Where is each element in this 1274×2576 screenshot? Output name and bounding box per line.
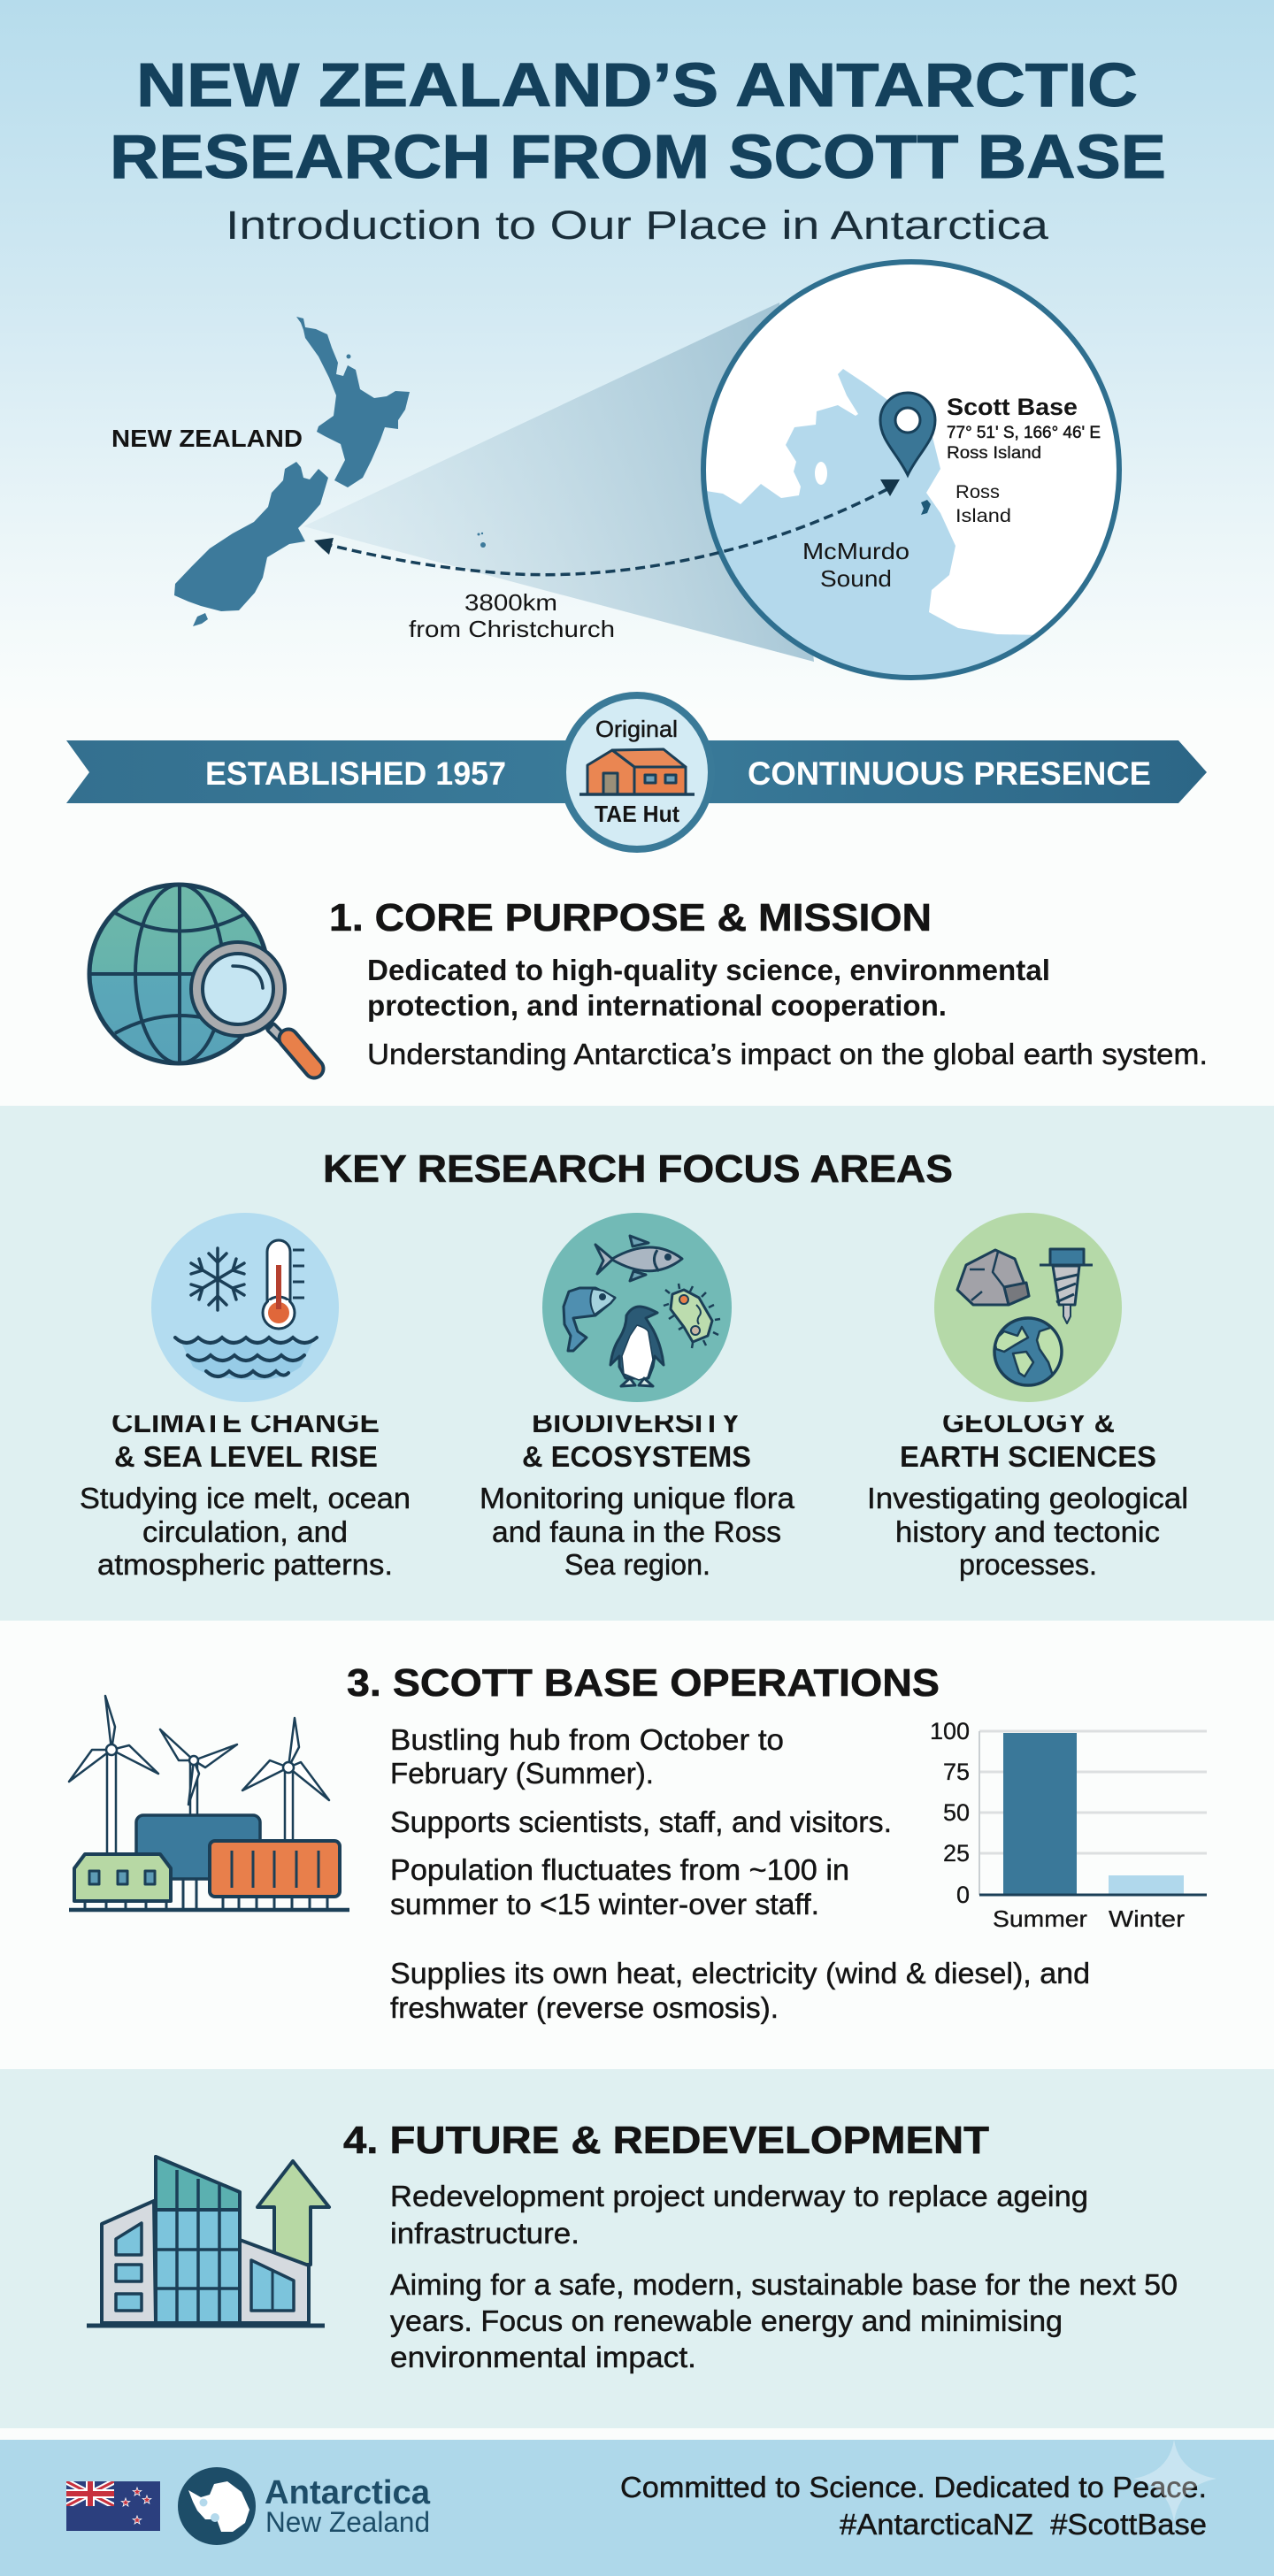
label: distance: 3800km <box>464 589 557 616</box>
subtitle: Introduction to Our Place in Antarctica <box>226 203 1049 248</box>
text: operations details: Bustling hub from October to <box>390 1723 784 1756</box>
text: operations details: Supports scientists, staff, and visitors. <box>390 1806 892 1838</box>
text: operations details: summer to <15 winter-over staff. <box>390 1888 819 1920</box>
logo: Antarctica New Zealand <box>178 2467 431 2545</box>
section 1: core purpose <box>88 884 1208 1070</box>
text: climate <box>80 1482 411 1581</box>
heading: KEY RESEARCH FOCUS AREAS <box>323 1147 953 1191</box>
label: distance: from Christchurch <box>409 616 615 642</box>
text: mission statement: Dedicated to high-quality science, environmental <box>367 954 1050 986</box>
text: mission statement <box>367 954 1050 1022</box>
icon: globe with magnifier <box>88 884 314 1069</box>
label: New Zealand: NEW ZEALAND <box>111 425 303 452</box>
text: understanding: Understanding Antarctica’s impact on the global earth system. <box>367 1038 1208 1070</box>
heading: 1. CORE PURPOSE & MISSION <box>329 896 932 939</box>
medallion: original TAE hut <box>563 695 711 849</box>
text: operations details: February (Summer). <box>390 1757 654 1790</box>
text: redevelopment details: Redevelopment project underway to replace ageing <box>390 2180 1088 2212</box>
label: McMurdo Sound: McMurdo <box>802 538 909 564</box>
text: redevelopment details: years. Focus on renewable energy and minimising <box>390 2304 1063 2337</box>
icon: wind turbines and buildings <box>69 1696 349 1910</box>
label: Ross Island: Ross <box>956 482 1000 502</box>
bar chart: population summer vs winter: Summer <box>993 1905 1087 1932</box>
heading: climate: & SEA LEVEL RISE <box>114 1440 378 1473</box>
logo wordmark: New Zealand <box>265 2506 430 2538</box>
title: NEW ZEALAND’S ANTARCTIC <box>136 50 1138 119</box>
text: climate: Studying ice melt, ocean <box>80 1482 411 1514</box>
panel: key research focus areas <box>0 1106 1274 1621</box>
text: redevelopment details <box>390 2180 1178 2373</box>
text: operations details: Supplies its own heat, electricity (wind & diesel), and <box>390 1957 1090 1990</box>
icon circle: biodiversity <box>542 1213 732 1402</box>
label: Scott Base: Ross Island <box>947 444 1041 463</box>
label: distance <box>409 589 615 642</box>
small island <box>921 500 931 515</box>
label: Ross Island: Island <box>956 506 1011 526</box>
focus: biodiversity <box>480 1213 795 1581</box>
bar chart: population summer vs winter: 0 <box>956 1882 970 1908</box>
tagline and hashtags: #AntarcticaNZ #ScottBase <box>840 2508 1207 2541</box>
page background <box>0 0 1274 708</box>
banner text: established: ESTABLISHED 1957 <box>205 755 506 792</box>
heading: geology <box>900 1406 1156 1473</box>
heading: geology: EARTH SCIENCES <box>900 1440 1156 1473</box>
icon: location pin <box>880 393 935 475</box>
heading: biodiversity <box>522 1406 751 1473</box>
text: redevelopment details: environmental impact. <box>390 2341 696 2373</box>
text: biodiversity: Sea region. <box>564 1548 710 1581</box>
panel: future and redevelopment <box>0 2069 1274 2428</box>
icon circle: climate <box>151 1213 339 1402</box>
heading: biodiversity: BIODIVERSITY <box>532 1406 741 1438</box>
logo wordmark <box>265 2474 431 2538</box>
heading: 4. FUTURE & REDEVELOPMENT <box>343 2119 989 2162</box>
label: Ross Island <box>956 482 1011 526</box>
decorative sparkle <box>1133 2440 1216 2522</box>
icon: New Zealand flag <box>66 2481 160 2531</box>
text: geology: processes. <box>959 1548 1097 1581</box>
title <box>110 50 1166 191</box>
heading: 3. SCOTT BASE OPERATIONS <box>347 1661 940 1705</box>
heading: climate: CLIMATE CHANGE <box>111 1406 380 1438</box>
label: McMurdo Sound: Sound <box>820 565 892 592</box>
map: New Zealand <box>174 317 486 626</box>
focus: climate change <box>80 1213 411 1581</box>
bar chart: population summer vs winter: 50 <box>943 1799 970 1826</box>
text: redevelopment details: Aiming for a safe, modern, sustainable base for the next 50 <box>390 2268 1178 2301</box>
bar chart: population summer vs winter <box>930 1718 1207 1932</box>
text: geology: Investigating geological <box>867 1482 1188 1514</box>
text: biodiversity: Monitoring unique flora <box>480 1482 795 1514</box>
icon circle: geology <box>934 1213 1122 1402</box>
tagline and hashtags <box>620 2471 1207 2541</box>
dashed distance arrow <box>314 479 900 575</box>
inset circle map <box>690 262 1119 708</box>
text: operations details: freshwater (reverse osmosis). <box>390 1991 779 2024</box>
icon: hut <box>579 749 695 794</box>
heading: geology: GEOLOGY & <box>942 1406 1115 1438</box>
text: biodiversity: and fauna in the Ross <box>492 1515 781 1548</box>
focus: geology <box>867 1213 1188 1581</box>
bar chart: population summer vs winter: 25 <box>943 1840 970 1867</box>
text: redevelopment details: infrastructure. <box>390 2217 579 2250</box>
text: climate: circulation, and <box>142 1515 348 1548</box>
bar chart: population summer vs winter: 100 <box>930 1718 970 1744</box>
bar chart: population summer vs winter: Winter <box>1109 1905 1185 1932</box>
text: geology <box>867 1482 1188 1581</box>
map: New Zealand to Scott Base <box>111 262 1119 708</box>
banner text: presence: CONTINUOUS PRESENCE <box>748 755 1151 792</box>
text: operations details: Population fluctuates from ~100 in <box>390 1853 849 1886</box>
text: operations details <box>390 1723 1090 2024</box>
footer <box>0 2440 1274 2576</box>
label: original: Original <box>595 716 678 742</box>
banner ribbon <box>66 740 1207 803</box>
label: McMurdo Sound <box>802 538 909 592</box>
tagline and hashtags: Committed to Science. Dedicated to Peace. <box>620 2471 1207 2503</box>
label: TAE Hut: TAE Hut <box>595 801 679 827</box>
zoom cone <box>303 303 814 662</box>
section 3: Scott Base operations <box>69 1661 1207 2024</box>
title: RESEARCH FROM SCOTT BASE <box>110 122 1166 191</box>
heading: biodiversity: & ECOSYSTEMS <box>522 1440 751 1473</box>
label: Scott Base: Scott Base <box>947 394 1078 420</box>
text: biodiversity <box>480 1482 795 1581</box>
label: Scott Base: 77° 51' S, 166° 46' E <box>947 424 1101 442</box>
heading: climate <box>111 1406 380 1473</box>
label: Scott Base <box>947 394 1101 463</box>
text: geology: history and tectonic <box>895 1515 1160 1548</box>
text: mission statement: protection, and international cooperation. <box>367 989 947 1022</box>
logo wordmark: Antarctica <box>265 2474 431 2511</box>
bar chart: population summer vs winter: 75 <box>943 1759 970 1785</box>
text: climate: atmospheric patterns. <box>97 1548 393 1581</box>
icon: modern building with up arrow <box>87 2157 329 2326</box>
